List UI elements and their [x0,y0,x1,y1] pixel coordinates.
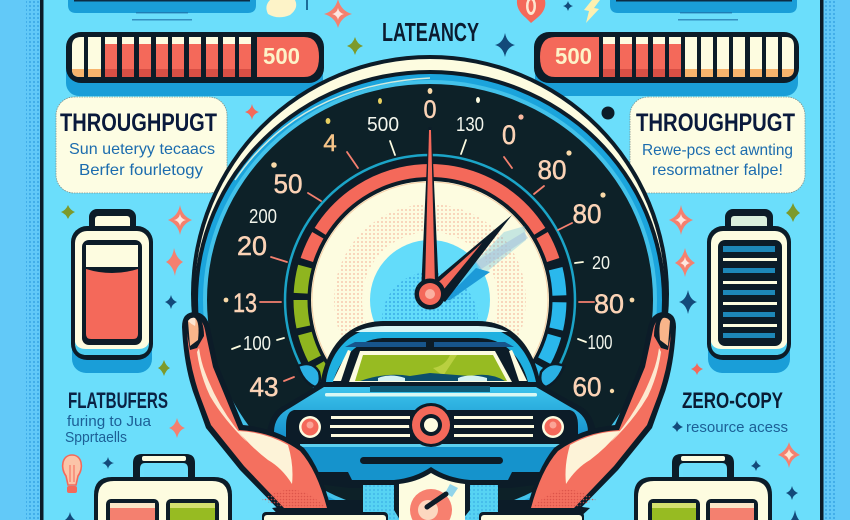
gauge main needle [421,127,439,293]
gauge numerals: 0 [424,96,436,124]
gauge numerals: 500 [367,114,399,136]
heading: throughput left: THROUGHPUGT [60,109,217,137]
gauge numerals: 80 [538,155,566,185]
text: flatbuffers block: FLATBUFERS [68,388,168,413]
gauge numerals: 80 [572,199,602,229]
left hand [182,312,332,513]
gauge numerals: 100 [588,332,612,354]
text: zero-copy block [672,388,788,436]
heading: throughput right: THROUGHPUGT [636,109,795,137]
icon: light bulb [63,455,81,493]
text: throughput left description: Sun ueteryy tecaacs [69,141,215,158]
text: zero-copy block: resource acess [686,419,788,436]
heading: latency: LATEANCY [382,17,479,47]
gauge dots [224,88,634,393]
left progress bar [66,32,324,96]
gauge tick marks [232,140,594,381]
gauge numerals [233,96,624,402]
gauge numerals: 4 [323,130,337,157]
car roof and cabin [320,321,541,386]
gauge numerals: 100 [243,333,271,355]
text: zero-copy block: ZERO-COPY [682,388,783,413]
gauge hub [414,278,446,310]
panel: throughput left [56,97,227,193]
car headlights [299,416,564,438]
icon: right briefcase [634,454,772,520]
text: throughput right description: Rewe-pcs ect awnting [642,142,793,159]
gauge numerals: 130 [456,114,484,136]
right hand [526,312,676,513]
gauge numerals: 200 [249,206,277,228]
icon: left battery [71,209,153,373]
gauge dial face [311,181,549,419]
gauge inner ring segments [247,117,613,483]
gauge numerals: 0 [502,120,516,150]
gauge numerals: 20 [237,231,267,261]
gauge outer rim [191,55,669,520]
text: flatbuffers block: furing to Jua [67,413,152,430]
car body and hood [266,383,597,488]
text: throughput right description [642,142,793,179]
top-right panel fragment [610,0,797,20]
text: flatbuffers block: Spprtaells [65,429,127,446]
car grille [330,416,534,437]
right progress bar [534,32,799,96]
icon: left briefcase [94,454,232,520]
left progress bar: 500 [263,43,300,69]
gauge numerals: 43 [250,372,278,402]
icon: car [266,321,597,488]
text: throughput left description: Berfer fourletogy [79,162,203,179]
gauge numerals: 50 [274,169,302,199]
icon: right battery [707,209,791,373]
gauge secondary needle [425,215,528,304]
gauge numerals: 20 [592,253,610,273]
gauge numerals: 60 [572,372,602,402]
car emblem [409,403,453,447]
text: flatbuffers block [65,388,168,446]
gauge numerals: 13 [233,288,257,318]
shield badge [363,467,498,520]
gauge numerals: 80 [594,289,624,319]
top-left panel fragment [68,0,256,20]
panel: throughput right [630,97,805,193]
bottom cards [262,512,584,520]
chart: speedometer gauge [191,55,669,520]
lower dark base [272,500,590,520]
text: throughput right description: resormatner falpe! [652,162,783,179]
right progress bar: 500 [555,43,592,69]
car side mirrors [298,364,564,387]
text: throughput left description [69,141,215,179]
